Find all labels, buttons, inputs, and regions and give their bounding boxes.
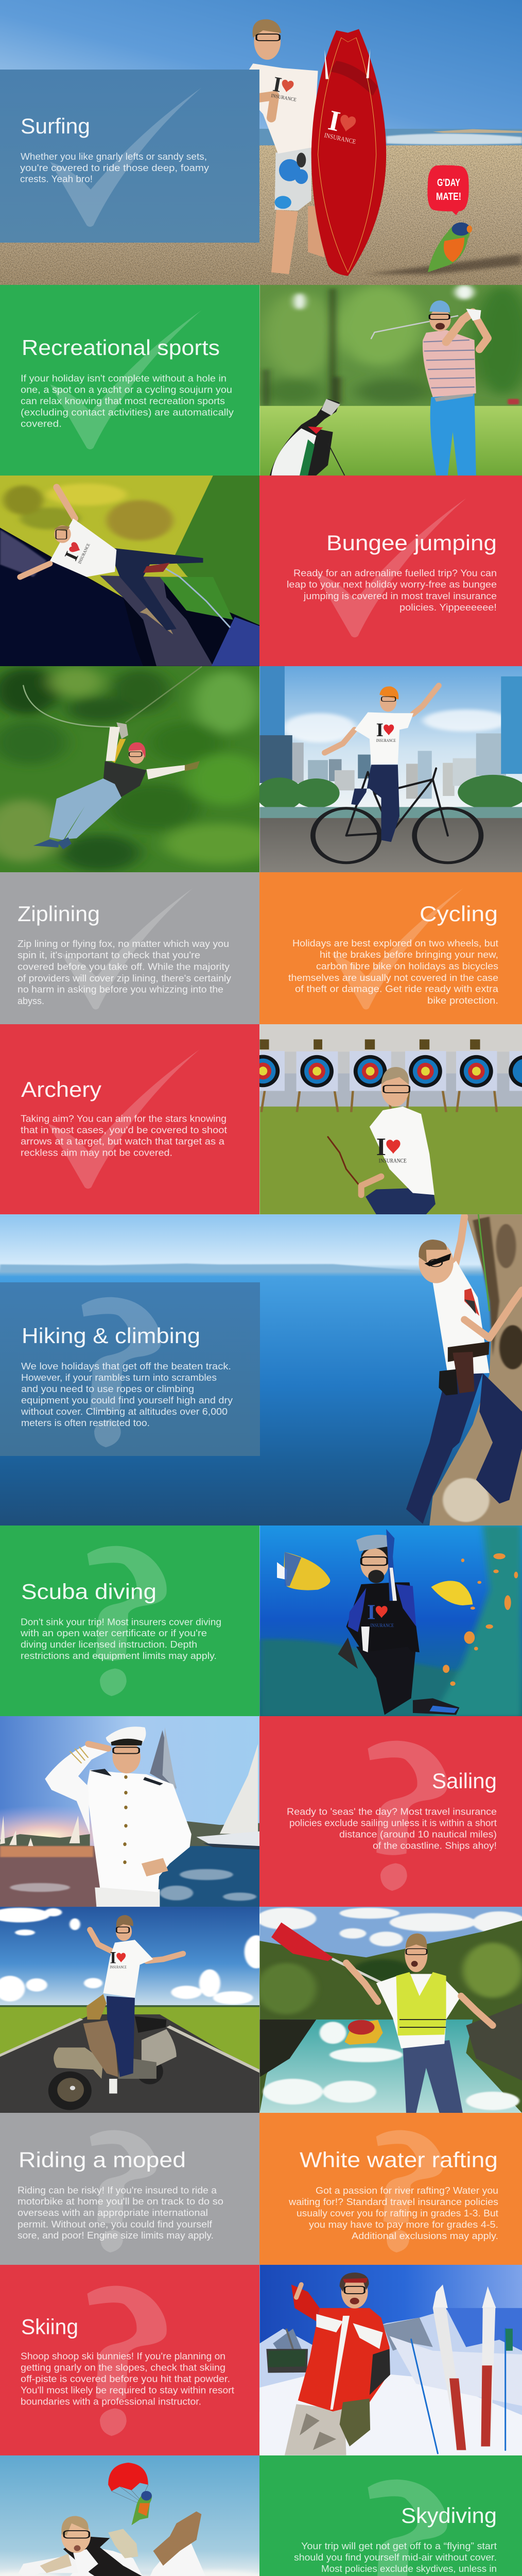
section: sailing	[0, 1716, 522, 1908]
icon: tick watermark	[48, 1049, 200, 1189]
body text: themselves are usually not covered in the case	[288, 973, 498, 983]
callout: g'day mate: G'DAY	[437, 177, 460, 189]
photo: diver on a reef: INSURANCE	[371, 1623, 394, 1629]
body text: policies. Yippeeeeee!	[399, 602, 497, 613]
panel: surfing text	[0, 70, 259, 243]
body text: one, a spot on a yacht or a cycling soujurn you	[21, 384, 232, 395]
section: scuba diving	[0, 1526, 522, 1717]
body text: Ready to 'seas' the day? Most travel insurance	[287, 1806, 497, 1817]
body text: Got a passion for river rafting? Water you	[316, 2185, 498, 2196]
body text: Ready for an adrenaline fuelled trip? You can	[293, 568, 497, 579]
body text: overseas with an appropriate international	[18, 2208, 208, 2218]
panel: recreational sports text	[0, 285, 259, 476]
heading: Skiing	[21, 2315, 78, 2339]
heading: Archery	[21, 1077, 101, 1101]
section: recreational sports	[0, 283, 522, 476]
heading: Surfing	[21, 114, 90, 138]
body text: We love holidays that get off the beaten track.	[21, 1361, 231, 1371]
photo: cycling in the city	[256, 666, 522, 873]
photo: skydiver and lorikeet	[0, 2455, 273, 2576]
body text: with an open water certificate or if you're	[20, 1628, 207, 1638]
body text: you're covered to ride those deep, foamy	[20, 163, 209, 173]
photo: riding a moped	[0, 1907, 268, 2113]
photo: cycling in the city: I	[376, 719, 384, 740]
photo: golfer on fairway	[259, 283, 522, 476]
body text: covered before you take off. While the majority	[18, 961, 230, 972]
body text: Additional exclusions may apply.	[352, 2231, 498, 2241]
icon: question mark watermark	[368, 2480, 447, 2576]
photo: riding a moped: I	[110, 1948, 116, 1968]
body text: However, if your rambles turn into scrambles	[21, 1372, 217, 1383]
body text: should you find yourself mid-air without cover.	[294, 2552, 497, 2563]
body text: distance (around 10 nautical miles)	[339, 1829, 497, 1839]
panel: skiing text	[0, 2265, 259, 2455]
body text	[21, 373, 234, 429]
body text: getting gnarly on the slopes, check that skiing	[21, 2362, 225, 2372]
body text	[288, 938, 499, 1006]
icon: tick watermark	[331, 888, 463, 1009]
icon: question mark watermark	[368, 1741, 447, 1891]
icon: question mark watermark	[90, 2130, 156, 2252]
photo: diver on a reef: I	[367, 1600, 375, 1623]
body text	[287, 1806, 497, 1851]
body text	[293, 2541, 497, 2576]
heading: Riding a moped	[19, 2147, 186, 2172]
photo: riding a moped: INSURANCE	[110, 1964, 127, 1969]
body text: hit the brakes before bringing your new,	[320, 950, 498, 960]
body text: abyss.	[18, 996, 44, 1006]
body text: motorbike at home you'll be on track to do so	[18, 2196, 223, 2207]
body text: and you need to use ropes or climbing	[21, 1384, 194, 1394]
body text: (excluding contact activities) are automatically	[21, 407, 234, 417]
body text: of the coastline. Ships ahoy!	[373, 1841, 497, 1851]
body text: You'll most likely be required to stay within resort	[21, 2385, 234, 2395]
heading: Ziplining	[18, 902, 100, 926]
panel: ziplining	[0, 872, 259, 1024]
body text: without cover. Climbing at altitudes over 6,000	[21, 1406, 228, 1417]
icon: question mark watermark	[87, 1546, 167, 1696]
panel: sailing text	[259, 1716, 522, 1907]
body text	[20, 151, 209, 184]
body text: equipment you could find yourself high and dry	[21, 1395, 233, 1405]
icon: question mark watermark	[81, 1297, 161, 1447]
body text: sore, and poor! Engine size limits may apply.	[18, 2230, 214, 2241]
body text: covered.	[21, 419, 62, 429]
photo: surfer on beach: I	[326, 104, 343, 138]
callout: g'day mate: MATE!	[436, 191, 461, 202]
photo: archery range: INSURANCE	[379, 1158, 407, 1164]
body text	[287, 568, 497, 613]
icon: tick watermark	[61, 888, 193, 1009]
body text	[18, 2185, 223, 2241]
heading: Recreational sports	[22, 335, 220, 360]
heading: Sailing	[432, 1769, 497, 1793]
body text: diving under licensed instruction. Depth	[21, 1639, 197, 1650]
body text	[20, 1617, 221, 1661]
photo: climber over the sea	[0, 1214, 522, 1526]
photo: archery range: I	[376, 1132, 386, 1161]
body text: arrows at a target, but watch that target as a	[21, 1136, 225, 1146]
body text: bike protection.	[427, 995, 498, 1006]
heading: Bungee jumping	[326, 531, 497, 555]
heading: Cycling	[420, 902, 498, 926]
heading: Scuba diving	[21, 1580, 156, 1604]
body text: restrictions and equipment limits may apply.	[21, 1651, 217, 1661]
body text: of providers will cover zip lining, there's certainly	[18, 973, 231, 984]
section: surfing	[0, 0, 522, 287]
body text: permit. Without one, you could find yourself	[18, 2219, 213, 2230]
panel: cycling	[259, 872, 522, 1024]
panel: bungee jumping text	[259, 476, 522, 666]
photo: sailor saluting	[0, 1716, 259, 1908]
body text: no harm in asking before you whizzing into the	[18, 984, 223, 994]
panel: hiking and climbing text	[0, 1282, 260, 1456]
body text: Holidays are best explored on two wheels, but	[292, 938, 498, 948]
body text	[18, 939, 231, 1006]
photo: cycling in the city: INSURANCE	[376, 738, 396, 743]
panel: archery text	[0, 1024, 259, 1214]
body text: that in most cases, you'd be covered to shoot	[21, 1125, 227, 1136]
photo: surfer on beach: INSURANCE	[271, 93, 297, 103]
panel: skydiving text	[259, 2455, 522, 2576]
section: archery	[0, 1024, 522, 1215]
body text	[21, 2351, 234, 2407]
body text: you may have to pay more for grades 4-5.	[309, 2219, 498, 2230]
body text	[21, 1361, 233, 1428]
photo: bungee jump	[0, 476, 259, 667]
photo: surfer on beach: INSURANCE	[324, 131, 357, 145]
section: bungee jumping	[0, 476, 522, 667]
heading: Hiking & climbing	[22, 1324, 200, 1348]
heading: Skydiving	[401, 2503, 497, 2528]
body text: Zip lining or flying fox, no matter which way you	[18, 939, 229, 949]
photo: archery range	[247, 1024, 522, 1215]
photo: white water rafting	[256, 1907, 522, 2113]
body text: Your trip will get not get off to a “flying” start	[301, 2541, 497, 2551]
body text: crests. Yeah bro!	[20, 174, 93, 184]
body text: Riding can be risky! If you're insured to ride a	[18, 2185, 217, 2196]
body text: Most policies exclude skydives, unless in	[321, 2564, 497, 2574]
panel: white water rafting	[259, 2113, 522, 2265]
photo: diver on a reef	[259, 1526, 522, 1717]
body text: boundaries with a professional instructor.	[21, 2397, 201, 2407]
body text: Whether you like gnarly lefts or sandy sets,	[21, 151, 207, 162]
body text: If your holiday isn't complete without a hole in	[21, 373, 227, 383]
body text: meters is often restricted too.	[21, 1418, 150, 1428]
body text	[21, 1114, 227, 1158]
body text: Don't sink your trip! Most insurers cover diving	[21, 1617, 221, 1628]
heading: White water rafting	[300, 2147, 498, 2172]
icon: tick watermark	[50, 310, 202, 449]
photo: bungee jump: INSURANCE	[77, 543, 91, 565]
icon: question mark watermark	[87, 2286, 167, 2436]
photo: surfer on beach: I	[271, 72, 284, 97]
body text: off-piste is covered before you hit that powder.	[21, 2374, 230, 2384]
body text: waiting for!? Standard travel insurance policies	[288, 2197, 498, 2207]
body text: of theft or damage. Get ride ready with extra	[295, 984, 499, 994]
body text: spin it, it's important to check that you're	[18, 950, 200, 960]
photo: bungee jump: I	[60, 548, 82, 564]
icon: question mark watermark	[376, 2130, 443, 2252]
photo: skier on the mountain	[259, 2265, 522, 2455]
body text: policies exclude sailing unless it is within a short	[289, 1818, 497, 1828]
body text: Taking aim? You can aim for the stars knowing	[21, 1114, 227, 1124]
section: hiking and climbing	[0, 1214, 522, 1526]
body text: leap to your next holiday worry-free as bungee	[287, 580, 497, 590]
body text: usually cover you for rafting in grades 1-3. But	[297, 2208, 498, 2218]
section: skydiving	[0, 2455, 522, 2576]
photo: ziplining through forest	[0, 666, 276, 873]
body text: Shoop shoop ski bunnies! If you're planning on	[21, 2351, 225, 2361]
icon: tick watermark	[50, 88, 202, 227]
panel: scuba diving text	[0, 1526, 259, 1716]
photo: surfer on beach	[0, 0, 522, 287]
body text: carbon fibre bike on holidays as bicycles	[316, 961, 498, 972]
callout: g'day mate	[436, 177, 461, 202]
body text: reckless aim may not be covered.	[21, 1148, 172, 1158]
body text: can relax knowing that most recreation sports	[21, 396, 225, 406]
panel: riding a moped	[0, 2113, 259, 2265]
body text	[288, 2185, 498, 2241]
body text: jumping is covered in most travel insurance	[303, 591, 497, 601]
icon: tick watermark	[315, 498, 466, 637]
section: skiing	[0, 2265, 522, 2455]
